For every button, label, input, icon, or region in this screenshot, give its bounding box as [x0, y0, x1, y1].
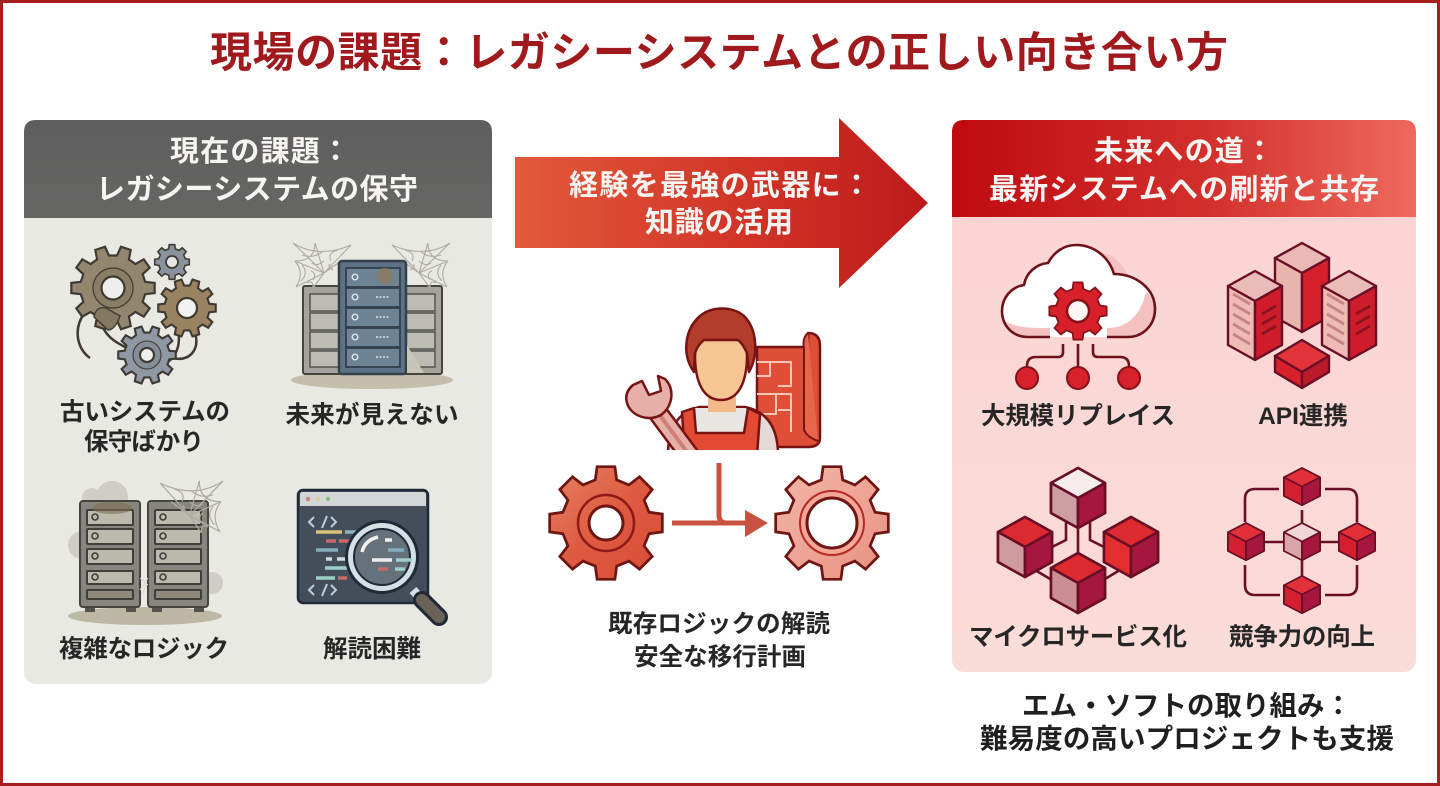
icon: cloud with gear	[1002, 245, 1155, 389]
panel body	[952, 120, 1416, 672]
icon: rusty gears	[71, 245, 216, 383]
closing text	[980, 690, 1394, 754]
panel heading	[989, 135, 1379, 206]
arrow text	[569, 169, 871, 239]
arrow: knowledge	[515, 118, 928, 288]
panel heading: 現在の課題：	[170, 135, 350, 168]
panel body	[24, 120, 492, 684]
icon: cube network	[1228, 468, 1375, 613]
panel: path to the future	[952, 120, 1416, 672]
title: 現場の課題：レガシーシステムとの正しい向き合い方	[210, 29, 1228, 76]
panel heading: 最新システムへの刷新と共存	[989, 173, 1379, 206]
label: 複雑なロジック	[59, 635, 229, 663]
icon: engineer with wrench and blueprint	[626, 308, 820, 456]
label: 解読困難	[323, 635, 421, 663]
icon: isometric servers	[1228, 243, 1376, 388]
panel heading	[96, 135, 418, 206]
label: 保守ばかり	[84, 428, 204, 456]
icon: gears migration	[550, 463, 888, 579]
gear: new	[776, 467, 888, 579]
gear: old	[550, 467, 662, 579]
arrow text: 経験を最強の武器に：	[569, 169, 871, 202]
closing text: 難易度の高いプロジェクトも支援	[980, 723, 1394, 754]
label: マイクロサービス化	[969, 623, 1187, 651]
arrow text: 知識の活用	[645, 206, 793, 239]
panel header	[952, 120, 1416, 217]
label: 大規模リプレイス	[981, 402, 1175, 430]
center text: 既存ロジックの解読	[608, 610, 830, 638]
center text: 安全な移行計画	[634, 643, 806, 671]
arrow: migration	[672, 463, 768, 537]
icon: old server racks	[68, 481, 223, 625]
label	[60, 398, 230, 456]
icon: code window and magnifier	[298, 490, 439, 617]
panel heading: 未来への道：	[1094, 135, 1274, 168]
center text	[608, 610, 830, 671]
panel: current issues	[24, 120, 492, 684]
label: 古いシステムの	[60, 398, 230, 426]
icon: microservice cubes	[998, 468, 1158, 613]
label: 未来が見えない	[286, 400, 458, 429]
panel header	[24, 120, 492, 218]
icon: dusty server with cobwebs	[291, 243, 453, 389]
closing text: エム・ソフトの取り組み：	[1022, 690, 1352, 721]
panel heading: レガシーシステムの保守	[96, 173, 418, 206]
label: API連携	[1258, 402, 1348, 430]
label: 競争力の向上	[1229, 623, 1375, 651]
